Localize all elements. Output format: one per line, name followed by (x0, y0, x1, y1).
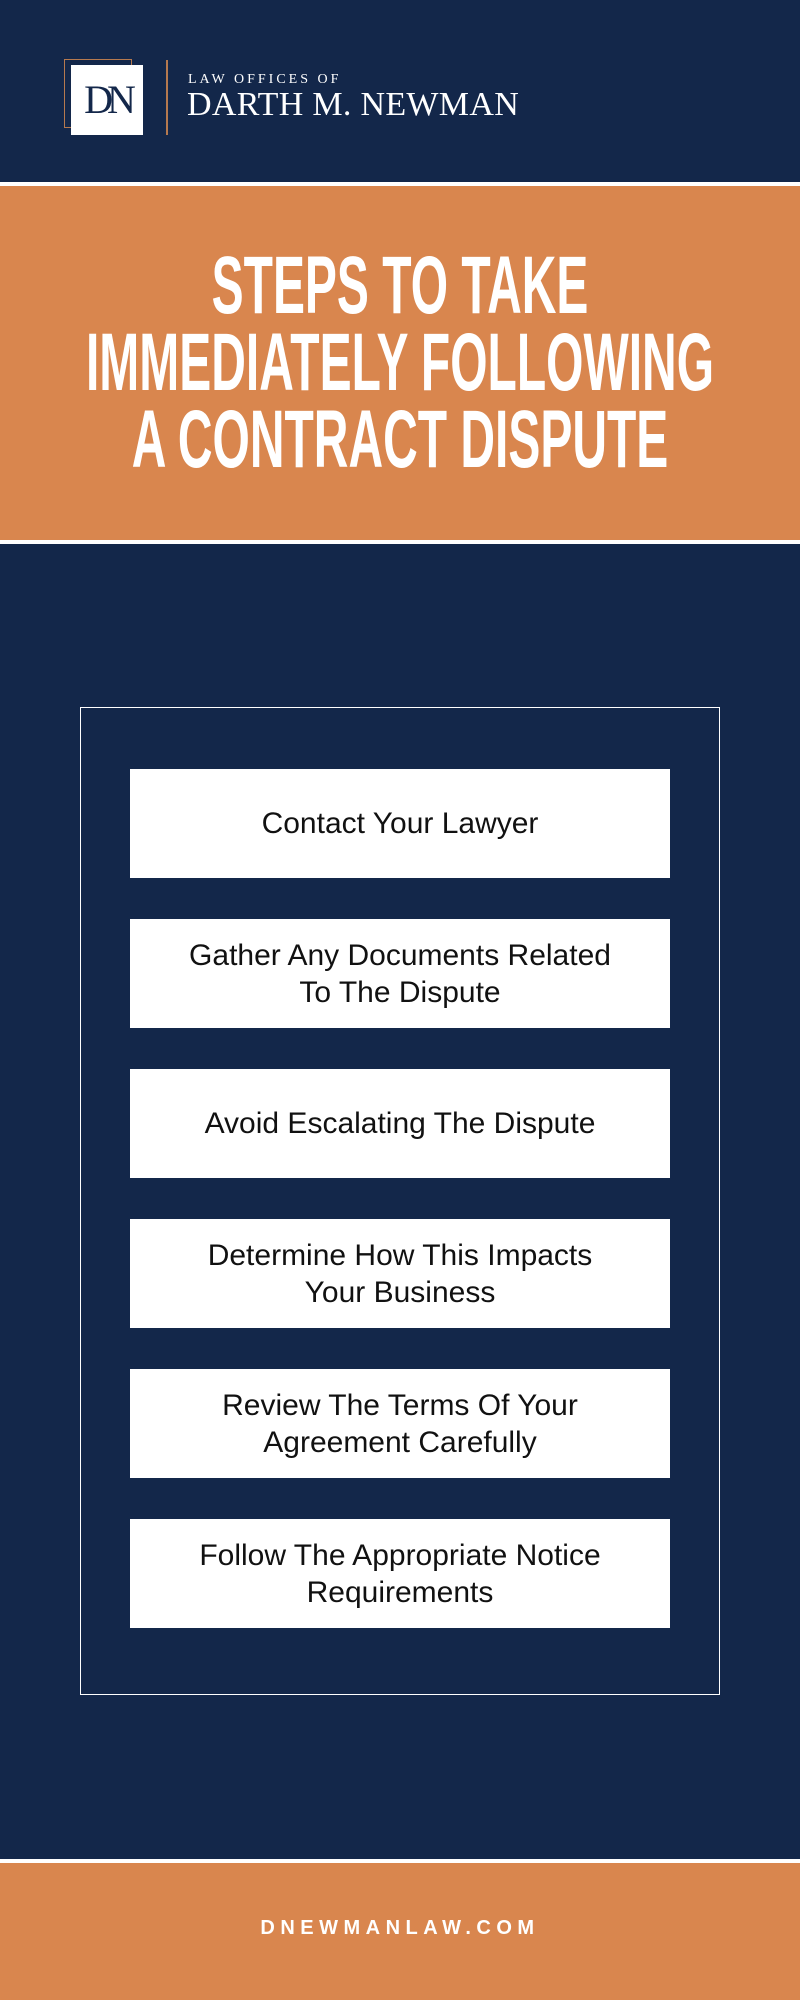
title: IMMEDIATELY FOLLOWING (86, 317, 714, 408)
header logo: DN (84, 77, 130, 122)
footer (0, 1859, 800, 2000)
step 2: Gather Any Documents Related To The Dispute (189, 938, 611, 1008)
step 3: Avoid Escalating The Dispute (205, 1107, 595, 1140)
title: STEPS TO TAKE (212, 240, 588, 331)
firm name: LAW OFFICES OF (188, 72, 341, 87)
title (86, 240, 714, 485)
step 6 (130, 1519, 670, 1628)
header logo: DARTH M. NEWMAN (187, 86, 519, 123)
title banner (0, 182, 800, 544)
panel: steps (80, 707, 720, 1695)
step 5: Review The Terms Of Your Agreement Carefully (222, 1388, 578, 1458)
title: A CONTRACT DISPUTE (132, 394, 668, 485)
step 3 (130, 1069, 670, 1178)
step 1: Contact Your Lawyer (262, 807, 538, 840)
footer: DNEWMANLAW.COM (260, 1917, 540, 1939)
icon: logo monogram (64, 59, 132, 128)
step 5 (130, 1369, 670, 1478)
header logo (64, 59, 519, 135)
step 1 (130, 769, 670, 878)
step 4: Determine How This Impacts Your Business (208, 1238, 592, 1308)
step 4 (130, 1219, 670, 1328)
step 2 (130, 919, 670, 1028)
step 6: Follow The Appropriate Notice Requirements (199, 1538, 601, 1608)
